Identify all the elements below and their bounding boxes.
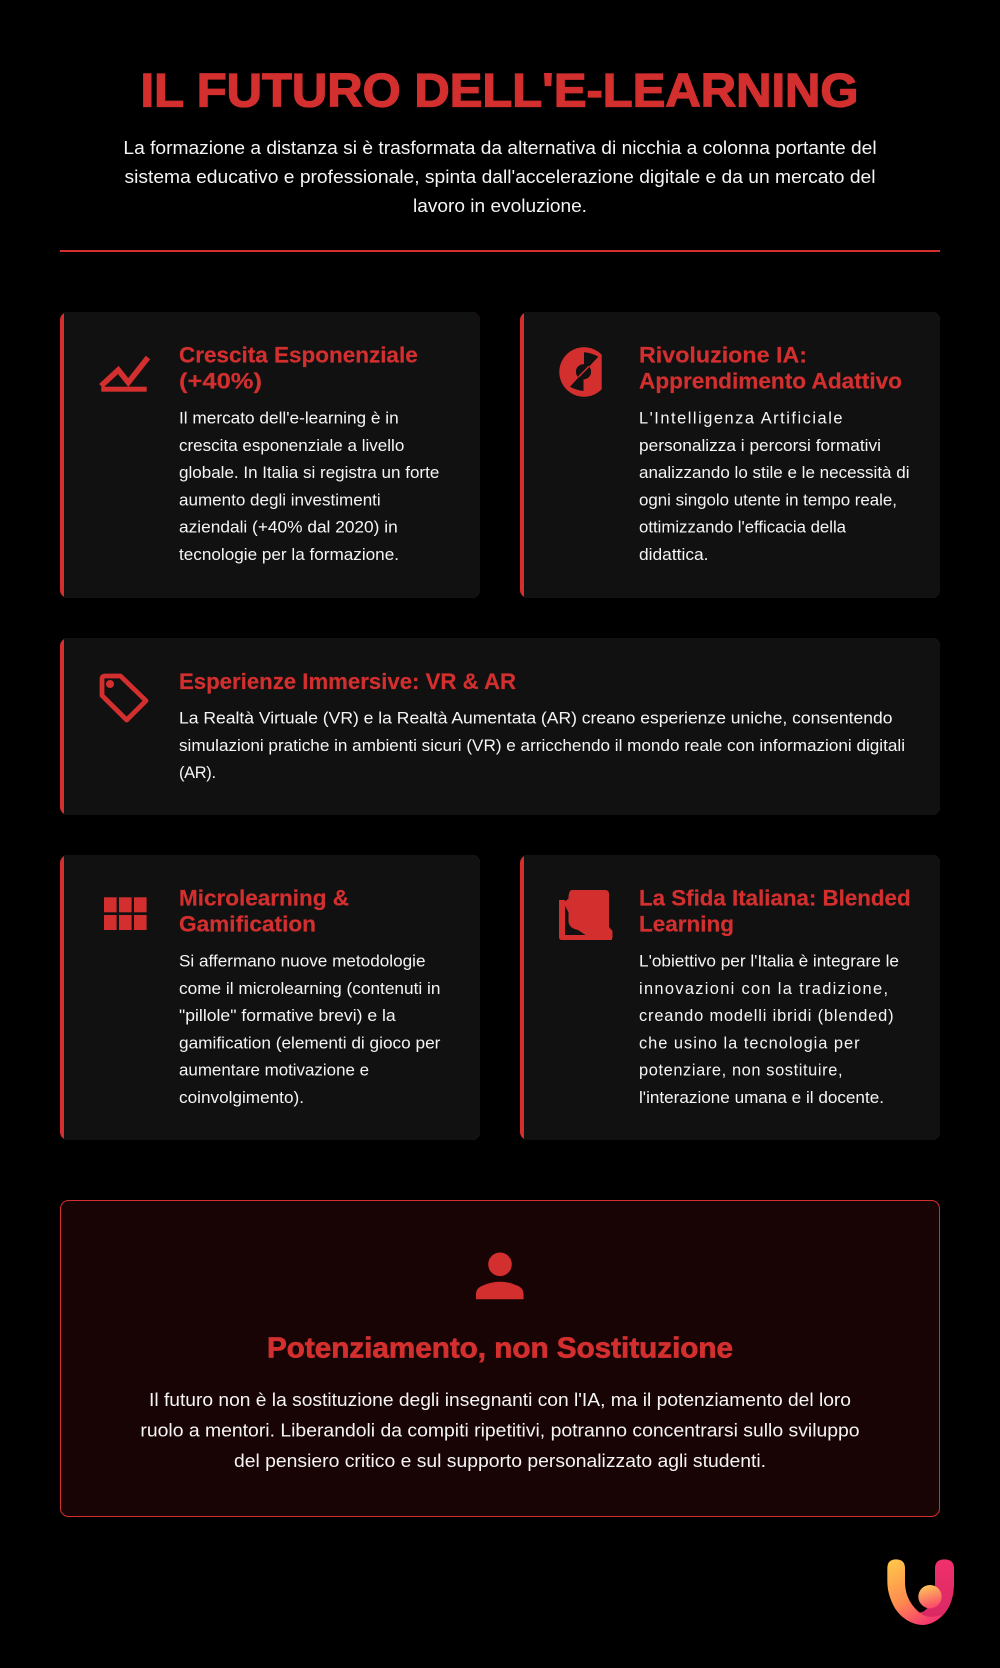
panel: esperienze immersive <box>60 638 940 815</box>
text block: aumentare motivazione e <box>179 1062 369 1080</box>
subtitle: La formazione a distanza si è trasformata da alternativa di nicchia a colonna portante del <box>123 137 877 158</box>
text block: creando modelli ibridi (blended) <box>639 1007 894 1025</box>
text block: tecnologie per la formazione. <box>179 546 399 564</box>
text block <box>639 410 910 564</box>
header <box>123 65 877 216</box>
heading: Potenziamento, non Sostituzione <box>267 1333 733 1365</box>
text block <box>639 953 899 1107</box>
text block: crescita esponenziale a livello <box>179 437 404 455</box>
text block: personalizza i percorsi formativi <box>639 437 881 455</box>
text block: Il futuro non è la sostituzione degli insegnanti con l'IA, ma il potenziamento del loro <box>149 1389 851 1410</box>
heading <box>639 343 902 394</box>
subtitle: lavoro in evoluzione. <box>413 195 587 216</box>
text block: innovazioni con la tradizione, <box>639 980 888 998</box>
text block <box>140 1389 860 1471</box>
icon: tag <box>102 676 146 720</box>
text block: didattica. <box>639 546 708 564</box>
panel: microlearning <box>60 855 480 1140</box>
text block: globale. In Italia si registra un forte <box>179 464 439 482</box>
heading: Esperienze Immersive: VR & AR <box>179 669 516 694</box>
text block: ogni singolo utente in tempo reale, <box>639 491 897 509</box>
text block: L'obiettivo per l'Italia è integrare le <box>639 953 899 971</box>
text block: analizzando lo stile e le necessità di <box>639 464 910 482</box>
heading: Rivoluzione IA: <box>639 343 807 368</box>
text block: del pensiero critico e sul supporto personalizzato agli studenti. <box>234 1450 766 1471</box>
heading <box>639 886 911 937</box>
heading: Apprendimento Adattivo <box>639 369 902 394</box>
text block: che usino la tecnologia per <box>639 1034 860 1052</box>
heading: La Sfida Italiana: Blended <box>639 886 911 911</box>
heading <box>179 343 418 394</box>
panel: la sfida italiana <box>520 855 940 1140</box>
text block <box>179 710 905 782</box>
icon: person <box>476 1252 524 1299</box>
text block: aziendali (+40% dal 2020) in <box>179 519 398 537</box>
heading: Microlearning & <box>179 886 349 911</box>
panel: conclusione <box>60 1200 940 1516</box>
icon: logo <box>887 1559 954 1625</box>
subtitle: sistema educativo e professionale, spinta dall'accelerazione digitale e da un mercato del <box>124 166 875 187</box>
text block: aumento degli investimenti <box>179 491 381 509</box>
text block: simulazioni pratiche in ambienti sicuri (VR) e arricchendo il mondo reale con informazioni digitali <box>179 737 905 755</box>
heading: Learning <box>639 912 734 937</box>
heading: (+40%) <box>179 369 262 394</box>
text block: gamification (elementi di gioco per <box>179 1034 441 1052</box>
title: IL FUTURO DELL'E-LEARNING <box>140 65 858 118</box>
icon: disc <box>559 347 602 397</box>
heading: Crescita Esponenziale <box>179 343 418 368</box>
text block: Si affermano nuove metodologie <box>179 953 426 971</box>
heading: Gamification <box>179 912 316 937</box>
text block: ruolo a mentori. Liberandoli da compiti ripetitivi, potranno concentrarsi sullo sviluppo <box>140 1420 860 1441</box>
text block <box>179 953 441 1107</box>
text block: L'Intelligenza Artificiale <box>639 410 842 428</box>
text block: l'interazione umana e il docente. <box>639 1089 884 1107</box>
icon: grid <box>104 897 147 930</box>
heading <box>179 886 349 937</box>
text block: potenziare, non sostituire, <box>639 1062 842 1080</box>
text block: ottimizzando l'efficacia della <box>639 519 847 537</box>
icon: trend line <box>101 358 148 392</box>
subtitle <box>123 137 877 216</box>
panel: crescita esponenziale <box>60 312 480 598</box>
text block: (AR). <box>179 764 216 782</box>
text block: coinvolgimento). <box>179 1089 304 1107</box>
text block: come il microlearning (contenuti in <box>179 980 440 998</box>
panel: rivoluzione IA <box>520 312 940 598</box>
text block: "pillole" formative brevi) e la <box>179 1007 397 1025</box>
icon: book <box>559 890 612 940</box>
text block: La Realtà Virtuale (VR) e la Realtà Aumentata (AR) creano esperienze uniche, consentendo <box>179 710 892 728</box>
text block: Il mercato dell'e-learning è in <box>179 410 399 428</box>
text block <box>179 410 439 564</box>
